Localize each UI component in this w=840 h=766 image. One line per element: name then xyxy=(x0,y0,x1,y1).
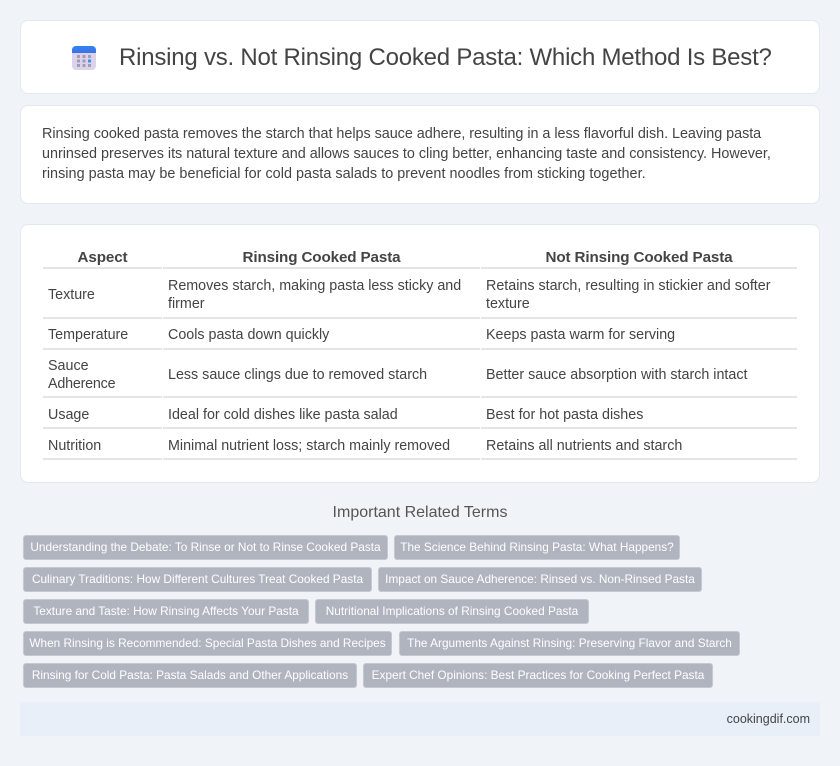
table header: rinsing: Rinsing Cooked Pasta xyxy=(243,249,400,266)
footer site name: cookingdif.com xyxy=(727,712,810,726)
related term tags xyxy=(23,535,740,688)
tag xyxy=(23,535,388,560)
cell: Removes starch, making pasta less sticky and xyxy=(168,278,461,294)
row: nutrition: Nutrition xyxy=(48,438,101,454)
row: texture: Texture xyxy=(48,287,95,303)
tag xyxy=(399,631,740,656)
cell: Retains all nutrients and starch xyxy=(486,438,682,454)
comparison table panel xyxy=(20,224,820,483)
row: usage: Usage xyxy=(48,407,89,423)
cell: Cools pasta down quickly xyxy=(168,327,329,343)
related terms heading: Important Related Terms xyxy=(333,504,507,521)
tag xyxy=(23,663,357,688)
intro text: Rinsing cooked pasta removes the starch that helps sauce adhere, resulting in a less flavorful dish. Leaving pasta xyxy=(42,126,761,142)
tag: Understanding the Debate: To Rinse or Not to Rinse Cooked Pasta xyxy=(30,540,381,554)
tag xyxy=(363,663,713,688)
cell: Less sauce clings due to removed starch xyxy=(168,367,427,383)
row: sauce adherence xyxy=(48,358,115,392)
tag xyxy=(23,567,372,592)
cell: Keeps pasta warm for serving xyxy=(486,327,675,343)
intro panel xyxy=(20,105,820,204)
tag: Culinary Traditions: How Different Cultures Treat Cooked Pasta xyxy=(32,572,363,586)
row: sauce adherence: Adherence xyxy=(48,376,115,392)
cell xyxy=(486,278,770,312)
tag xyxy=(378,567,702,592)
title: Rinsing vs. Not Rinsing Cooked Pasta: Which Method Is Best? xyxy=(119,44,772,71)
tag: The Science Behind Rinsing Pasta: What Happens? xyxy=(400,540,674,554)
tag: The Arguments Against Rinsing: Preserving Flavor and Starch xyxy=(407,636,732,650)
intro text xyxy=(42,126,771,182)
table header: not rinsing: Not Rinsing Cooked Pasta xyxy=(546,249,732,266)
tag: Rinsing for Cold Pasta: Pasta Salads and Other Applications xyxy=(32,668,348,682)
cell: Best for hot pasta dishes xyxy=(486,407,643,423)
tag xyxy=(23,599,309,624)
tag xyxy=(23,631,392,656)
row: sauce adherence: Sauce xyxy=(48,358,89,374)
intro text: unrinsed preserves its natural texture and allows sauces to cling better, enhancing taste and consistency. However, xyxy=(42,146,771,162)
tag: Impact on Sauce Adherence: Rinsed vs. Non-Rinsed Pasta xyxy=(385,572,695,586)
footer xyxy=(20,702,820,736)
cell: firmer xyxy=(168,296,205,312)
tag: Nutritional Implications of Rinsing Cooked Pasta xyxy=(326,604,578,618)
tag xyxy=(394,535,680,560)
cell: Ideal for cold dishes like pasta salad xyxy=(168,407,398,423)
table header: aspect: Aspect xyxy=(78,249,127,266)
tag: When Rinsing is Recommended: Special Pasta Dishes and Recipes xyxy=(29,636,386,650)
cell: Minimal nutrient loss; starch mainly removed xyxy=(168,438,450,454)
cell: texture xyxy=(486,296,530,312)
cell xyxy=(168,278,461,312)
cell: Better sauce absorption with starch intact xyxy=(486,367,747,383)
row: temperature: Temperature xyxy=(48,327,128,343)
intro text: rinsing pasta may be beneficial for cold pasta salads to prevent noodles from sticking together. xyxy=(42,166,646,182)
tag: Texture and Taste: How Rinsing Affects Your Pasta xyxy=(33,604,299,618)
icon: calendar xyxy=(72,46,96,70)
tag: Expert Chef Opinions: Best Practices for Cooking Perfect Pasta xyxy=(372,668,704,682)
header card xyxy=(20,20,820,94)
cell: Retains starch, resulting in stickier and softer xyxy=(486,278,770,294)
tag xyxy=(315,599,589,624)
